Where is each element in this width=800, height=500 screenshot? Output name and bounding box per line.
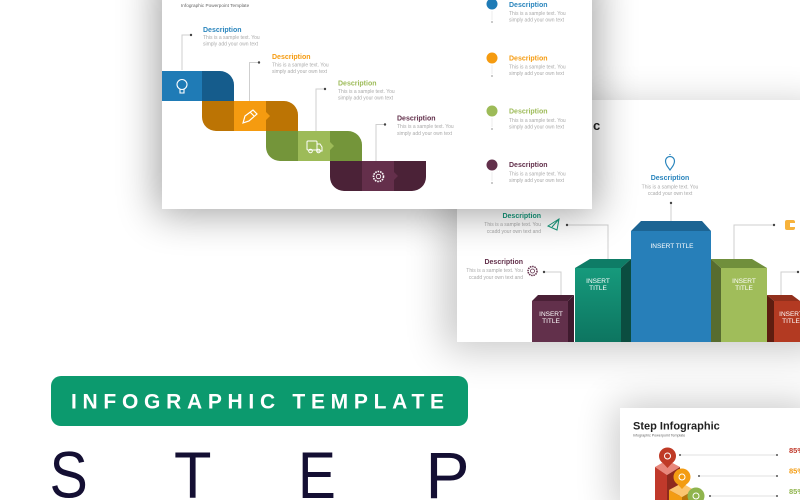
panel: ribbon steps slide [162,0,592,209]
callout: orange description: simply add your own text [272,69,328,75]
text block: teal description: This is a sample text. You [484,222,541,228]
text block: teal description [484,213,541,235]
bar: blue tallest step [631,221,711,342]
legend: orange item: This is a sample text. You [509,64,566,70]
callout: blue description: This is a sample text. You [203,35,260,41]
icon: blue light bulb [666,154,674,170]
legend: green item: Description [509,108,548,116]
chart: isometric steps with pins [655,448,704,500]
bar: teal step: TITLE [589,285,608,292]
text block: teal description: Description [502,213,541,220]
connector: blue bar to description [670,202,672,221]
panel: step infographic slide, lower right [620,408,800,500]
text block: teal description: ccadd your own text and [487,229,541,235]
badge: infographic template: INFOGRAPHIC TEMPLATE [71,390,444,414]
callout: green description [316,80,395,131]
legend: green item: simply add your own text [509,124,565,130]
ribbon: orange step [202,101,298,131]
panel: middle slide shadow [445,105,800,350]
callout: blue description [182,27,260,70]
badge: infographic template [51,376,468,426]
ribbon: green step [266,131,362,161]
heading fragment: slide title: c [593,118,600,133]
callout: orange description: This is a sample text. You [272,62,329,68]
legend: purple item: This is a sample text. You [509,172,566,178]
connector: green bar to icon [734,224,775,259]
connector: purple bar to description [543,271,561,295]
panel: top slide shadow [157,0,597,214]
connector: red bar [781,271,799,295]
icon: orange wallet [785,220,795,230]
text block: purple description: This is a sample text. You [466,268,523,274]
text block: purple description: Description [484,259,523,266]
icon: purple gear [528,266,537,276]
text block: purple description [466,259,523,281]
callout: orange description: Description [272,54,311,61]
icon: pencil [243,110,257,123]
legend: purple item [486,160,566,184]
legend: blue item: Description [509,2,548,9]
legend: purple item: Description [509,162,548,169]
legend: orange item [486,52,566,77]
connector: teal bar to description [566,224,608,259]
leader lines [679,454,778,497]
bar: green step: TITLE [735,285,754,292]
bar: purple step [532,295,574,342]
ribbon: blue step [162,71,234,101]
callout: green description: This is a sample text. You [338,89,395,95]
text block: blue description: Description [651,175,689,182]
text block: blue description [642,175,699,197]
legend: blue item: simply add your own text [509,18,565,24]
bar: purple step: TITLE [542,318,561,325]
bar: purple step: INSERT [539,311,563,318]
callout: blue description: Description [203,27,242,34]
text block: blue description: ccadd your own text [648,191,693,197]
callout: purple description: Description [397,116,436,122]
bar: red step [767,295,800,342]
bar: red step: TITLE [782,318,800,325]
callout: blue description: simply add your own text [203,42,259,48]
text: lower slide subtitle: Infographic Powerpoint Template [633,434,685,438]
icon: delivery truck [307,141,322,153]
bar: green step: INSERT [732,278,756,285]
panel: bar steps slide [457,100,800,342]
callout: orange description [250,54,329,101]
callout: purple description [376,116,454,161]
heading: lower slide title: Step Infographic [633,420,720,432]
bar: teal step [575,259,631,342]
legend: orange item: simply add your own text [509,71,565,77]
callout: green description: simply add your own text [338,96,394,102]
legend: green item: This is a sample text. You [509,118,566,124]
panel: lower right slide shadow [616,404,800,500]
legend: blue item [486,0,566,24]
legend: blue item: This is a sample text. You [509,11,566,17]
icon: teal paper plane [548,219,559,230]
text block: purple description: ccadd your own text and [469,275,523,281]
bar: teal step: INSERT [586,278,610,285]
ribbon: purple step [330,161,426,191]
bar: blue tallest step: INSERT TITLE [650,243,694,250]
legend: green item [486,106,566,130]
icon: gear [374,172,384,182]
heading: STEP [50,438,470,500]
bar: green step [711,259,767,342]
legend: orange item: Description [509,56,548,62]
icon: light bulb [177,80,187,93]
callout: purple description: This is a sample text. You [397,124,454,130]
text block: blue description: This is a sample text. You [642,184,699,190]
legend: purple item: simply add your own text [509,178,565,184]
callout: green description: Description [338,80,377,88]
callout: purple description: simply add your own text [397,131,453,137]
text: top slide subtitle: Infographic Powerpoint Template [181,3,250,8]
